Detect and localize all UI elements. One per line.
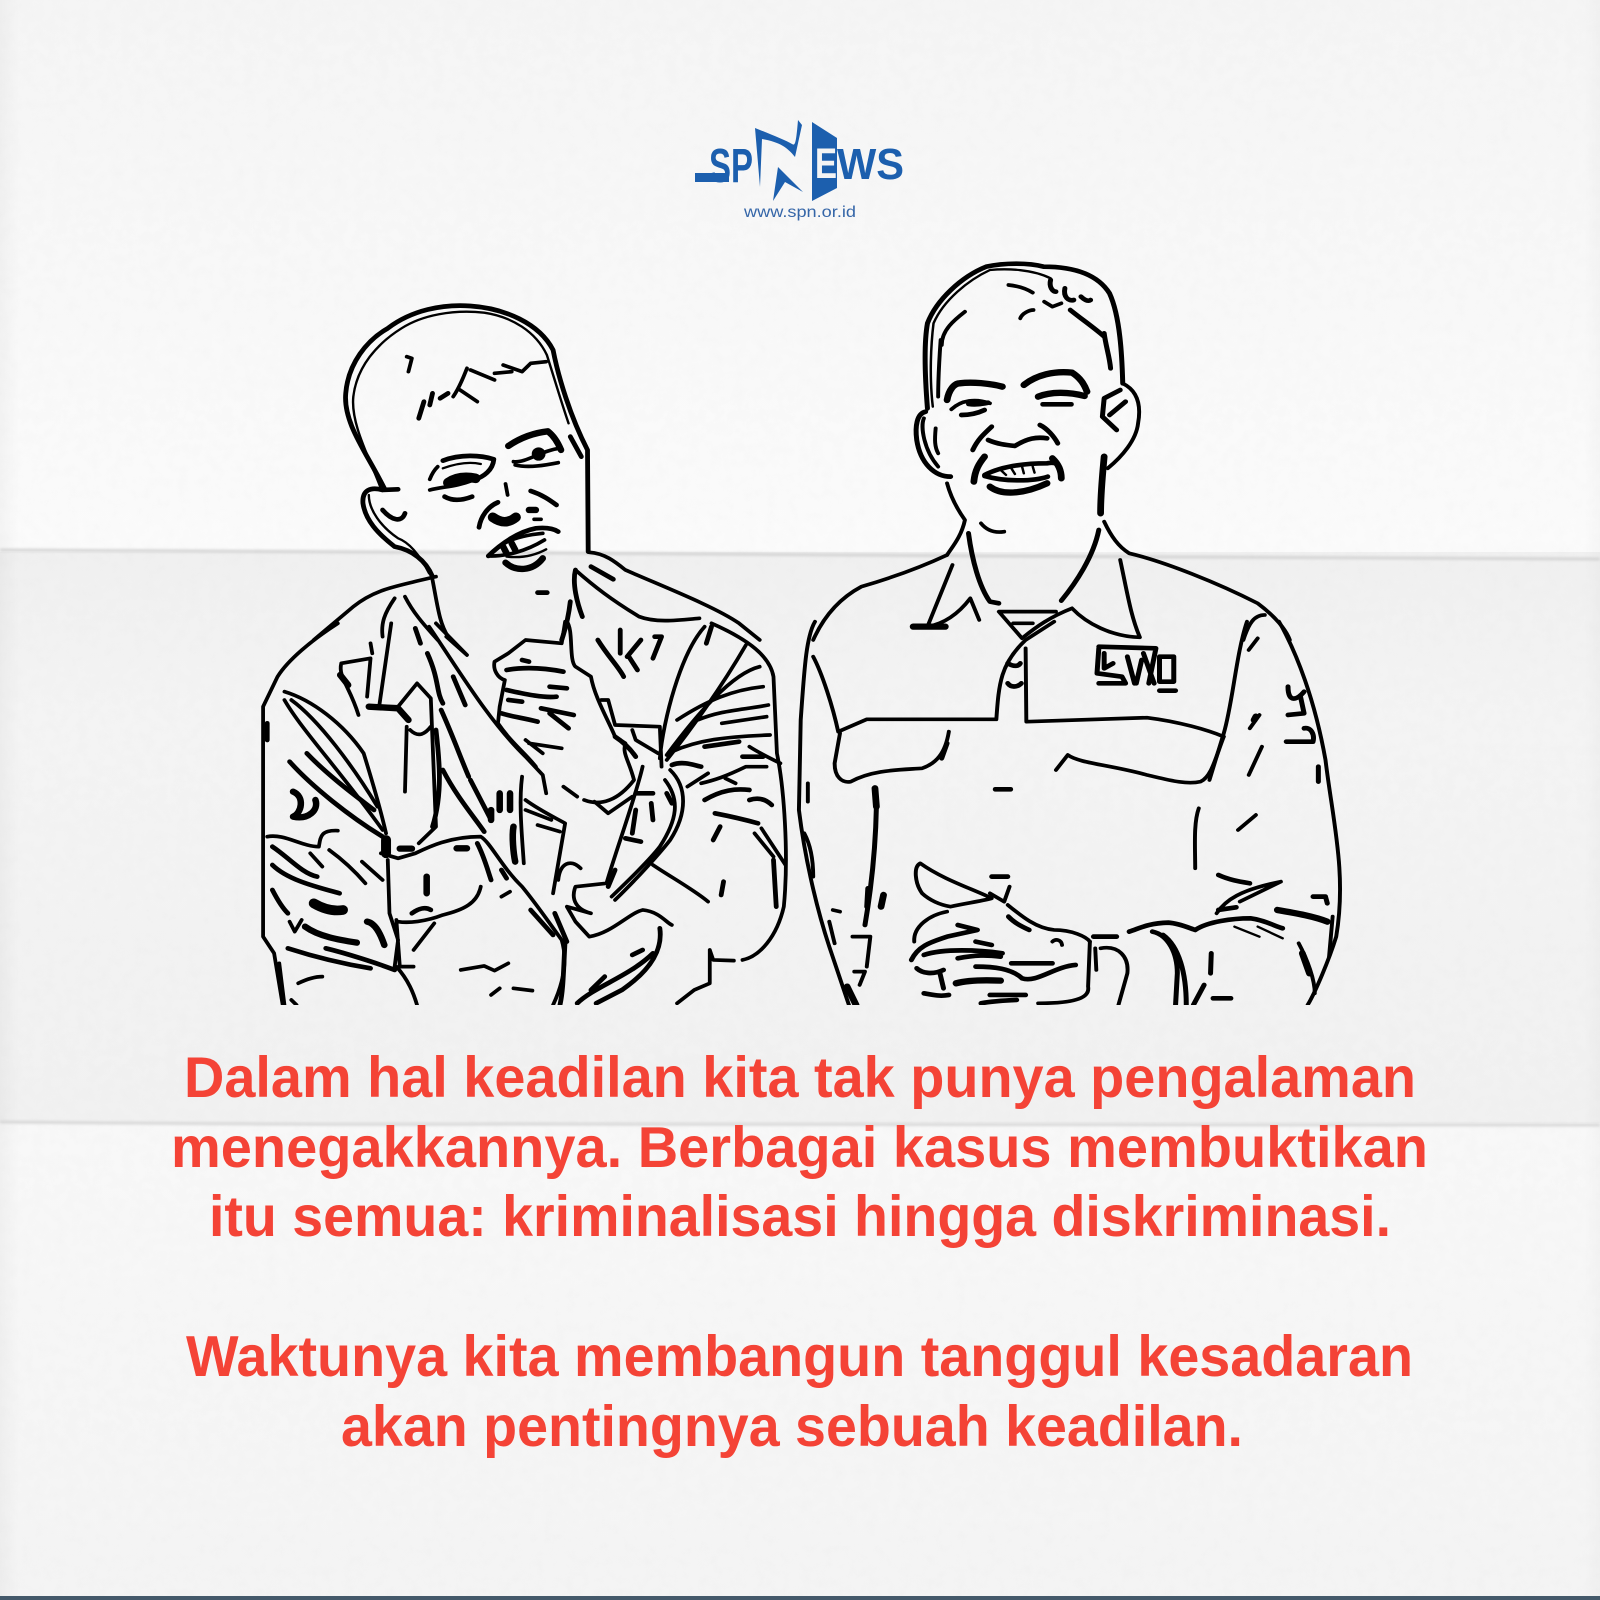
- line 5: akan pentingnya sebuah keadilan.: [341, 1395, 1243, 1459]
- line 1: Dalam hal keadilan kita tak punya pengalaman: [184, 1046, 1416, 1110]
- figure: left man torso and arms: [263, 622, 786, 1005]
- figure: right man head: [813, 264, 1290, 640]
- logo letters SP: SP: [709, 140, 753, 193]
- logo: SPN News: [695, 120, 904, 221]
- text block: closing paragraph: [186, 1325, 1413, 1459]
- logo mark: N arrows and door: [695, 120, 837, 201]
- logo url: www.spn.or.id: [743, 204, 856, 221]
- figure: right man torso and hands: [799, 622, 1340, 1005]
- line 4: Waktunya kita membangun tanggul kesadaran: [186, 1325, 1413, 1389]
- logo letters WS: WS: [837, 140, 904, 189]
- illustration: two men line drawing: [263, 264, 1340, 1005]
- logo letter E: E: [815, 140, 837, 188]
- line 2: menegakkannya. Berbagai kasus membuktikan: [171, 1116, 1428, 1180]
- line 3: itu semua: kriminalisasi hingga diskriminasi.: [209, 1185, 1391, 1249]
- text block: headline paragraph: [171, 1046, 1428, 1249]
- figure: left man head: [314, 306, 760, 640]
